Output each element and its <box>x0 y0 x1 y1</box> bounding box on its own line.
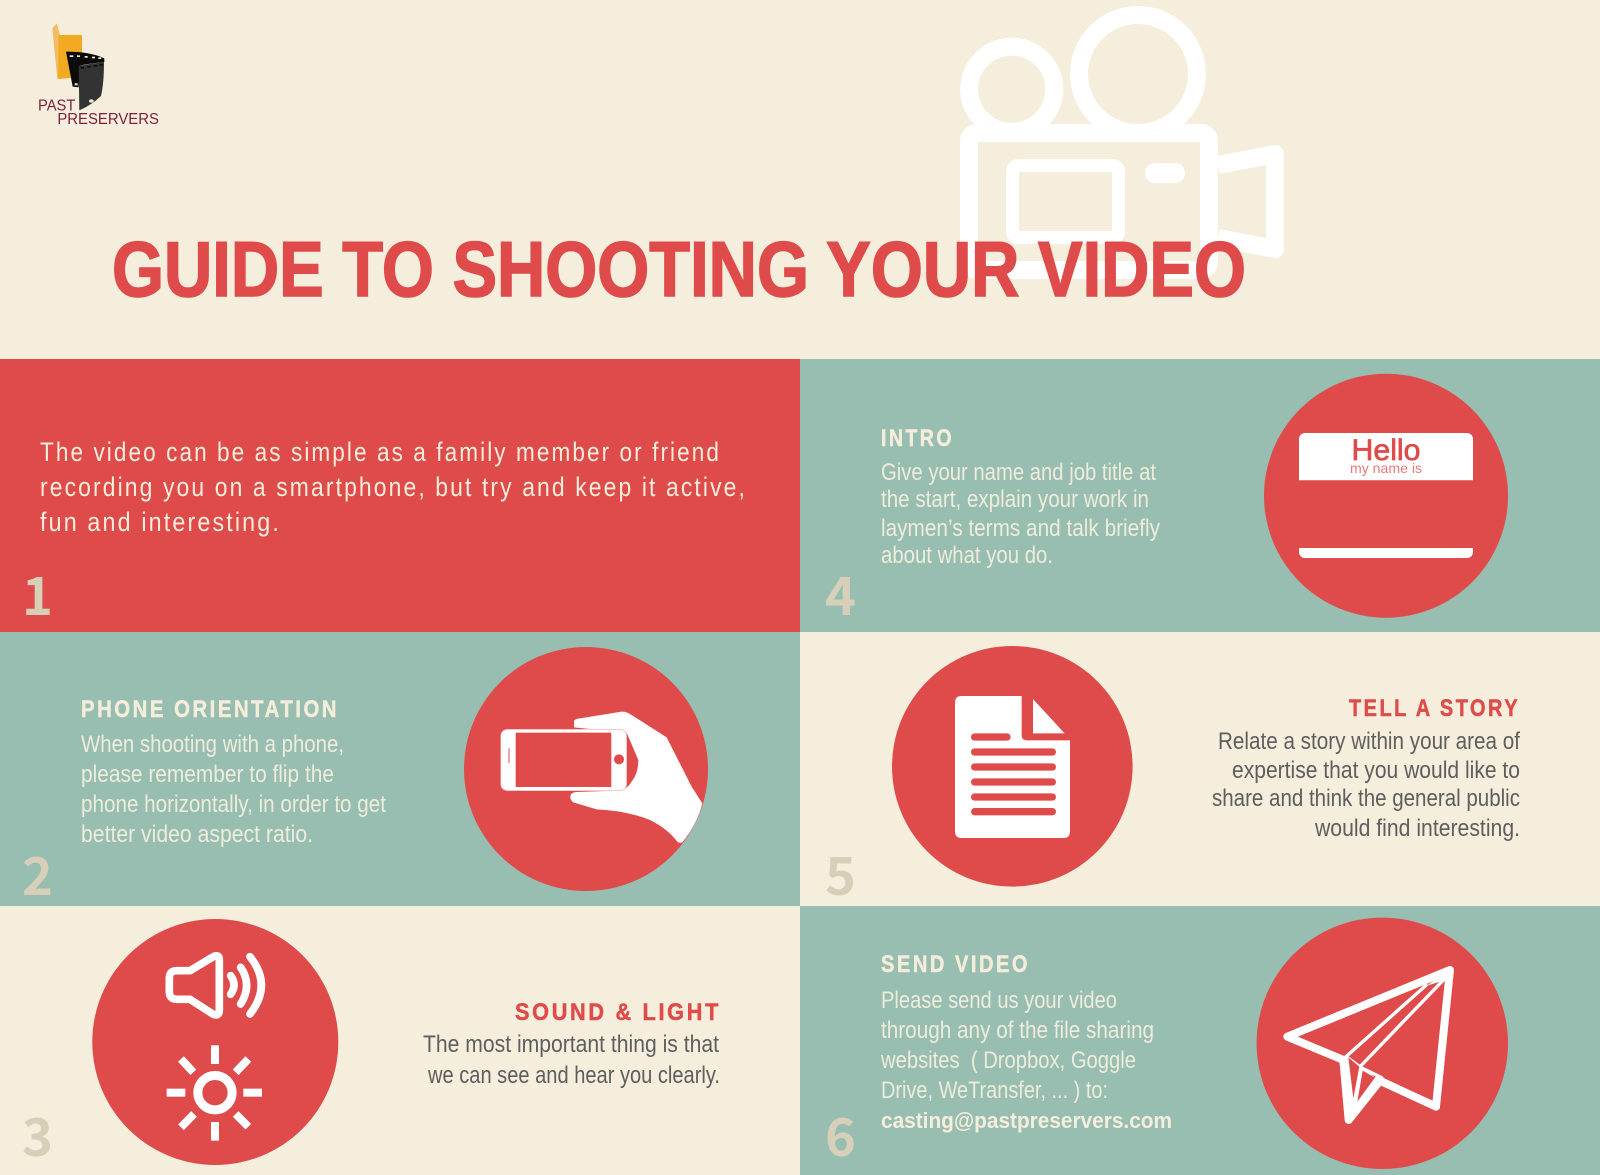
icon: paper plane <box>1257 918 1508 1169</box>
panel 1 text: fun and interesting. <box>40 507 281 537</box>
send video body text: through any of the file sharing <box>881 1017 1154 1044</box>
icon: hello name tag: my name is <box>1350 460 1422 476</box>
sound and light body text: The most important thing is that <box>423 1031 719 1058</box>
send video body text <box>880 987 1154 1104</box>
heading: sound and light: SOUND & LIGHT <box>515 999 721 1026</box>
icon: hand holding phone <box>464 647 708 891</box>
panel 3: sound and light <box>0 906 800 1175</box>
number 3: 3 <box>22 1096 53 1172</box>
icon: document <box>892 646 1133 887</box>
send video body text: Please send us your video <box>881 987 1117 1014</box>
heading: intro: INTRO <box>881 425 954 452</box>
phone orientation body text: When shooting with a phone, <box>81 731 344 758</box>
panel 1: introduction <box>0 359 800 632</box>
heading: send video: SEND VIDEO <box>881 951 1030 978</box>
title: GUIDE TO SHOOTING YOUR VIDEO <box>112 225 1246 313</box>
number 2: 2 <box>22 835 53 911</box>
phone orientation body text <box>81 731 386 848</box>
number 5: 5 <box>825 835 856 911</box>
panel 5: tell a story <box>800 632 1600 911</box>
email address: casting@pastpreservers.com <box>881 1108 1172 1133</box>
phone orientation body text: please remember to flip the <box>81 761 334 788</box>
tell a story body text: would find interesting. <box>1314 815 1520 842</box>
phone orientation body text: better video aspect ratio. <box>81 821 313 848</box>
intro body text: Give your name and job title at <box>881 459 1156 486</box>
logo: Past Preservers <box>38 23 159 128</box>
panel 1 text <box>40 437 747 537</box>
number 4: 4 <box>825 555 856 631</box>
phone orientation body text: phone horizontally, in order to get <box>81 791 386 818</box>
intro body text <box>881 459 1160 569</box>
panel 6: send video <box>800 906 1600 1175</box>
panel 2: phone orientation <box>0 632 800 911</box>
icon: speaker and sun <box>92 919 338 1165</box>
heading: phone orientation: PHONE ORIENTATION <box>81 696 339 723</box>
heading: tell a story: TELL A STORY <box>1349 695 1520 722</box>
logo: Past Preservers: PRESERVERS <box>57 111 159 128</box>
intro body text: about what you do. <box>881 542 1053 569</box>
sound and light body text <box>423 1031 720 1089</box>
number 1: 1 <box>22 555 53 631</box>
tell a story body text: expertise that you would like to <box>1232 757 1520 784</box>
icon: hello name tag: Hello <box>1352 434 1420 467</box>
panel 4: intro <box>800 359 1600 632</box>
intro body text: laymen’s terms and talk briefly <box>881 515 1160 542</box>
panel 1 text: recording you on a smartphone, but try and keep it active, <box>40 472 747 502</box>
number 6: 6 <box>825 1096 856 1172</box>
panel 1 text: The video can be as simple as a family member or friend <box>40 437 721 467</box>
tell a story body text <box>1212 728 1520 842</box>
tell a story body text: Relate a story within your area of <box>1218 728 1520 755</box>
icon: hello name tag <box>1264 374 1508 618</box>
sound and light body text: we can see and hear you clearly. <box>427 1062 720 1089</box>
send video body text: websites ( Dropbox, Goggle <box>880 1047 1136 1074</box>
send video body text: Drive, WeTransfer, ... ) to: <box>881 1077 1108 1104</box>
intro body text: the start, explain your work in <box>881 486 1149 513</box>
logo: Past Preservers: PAST <box>38 98 76 115</box>
tell a story body text: share and think the general public <box>1212 785 1520 812</box>
icon: video camera watermark <box>969 15 1275 270</box>
